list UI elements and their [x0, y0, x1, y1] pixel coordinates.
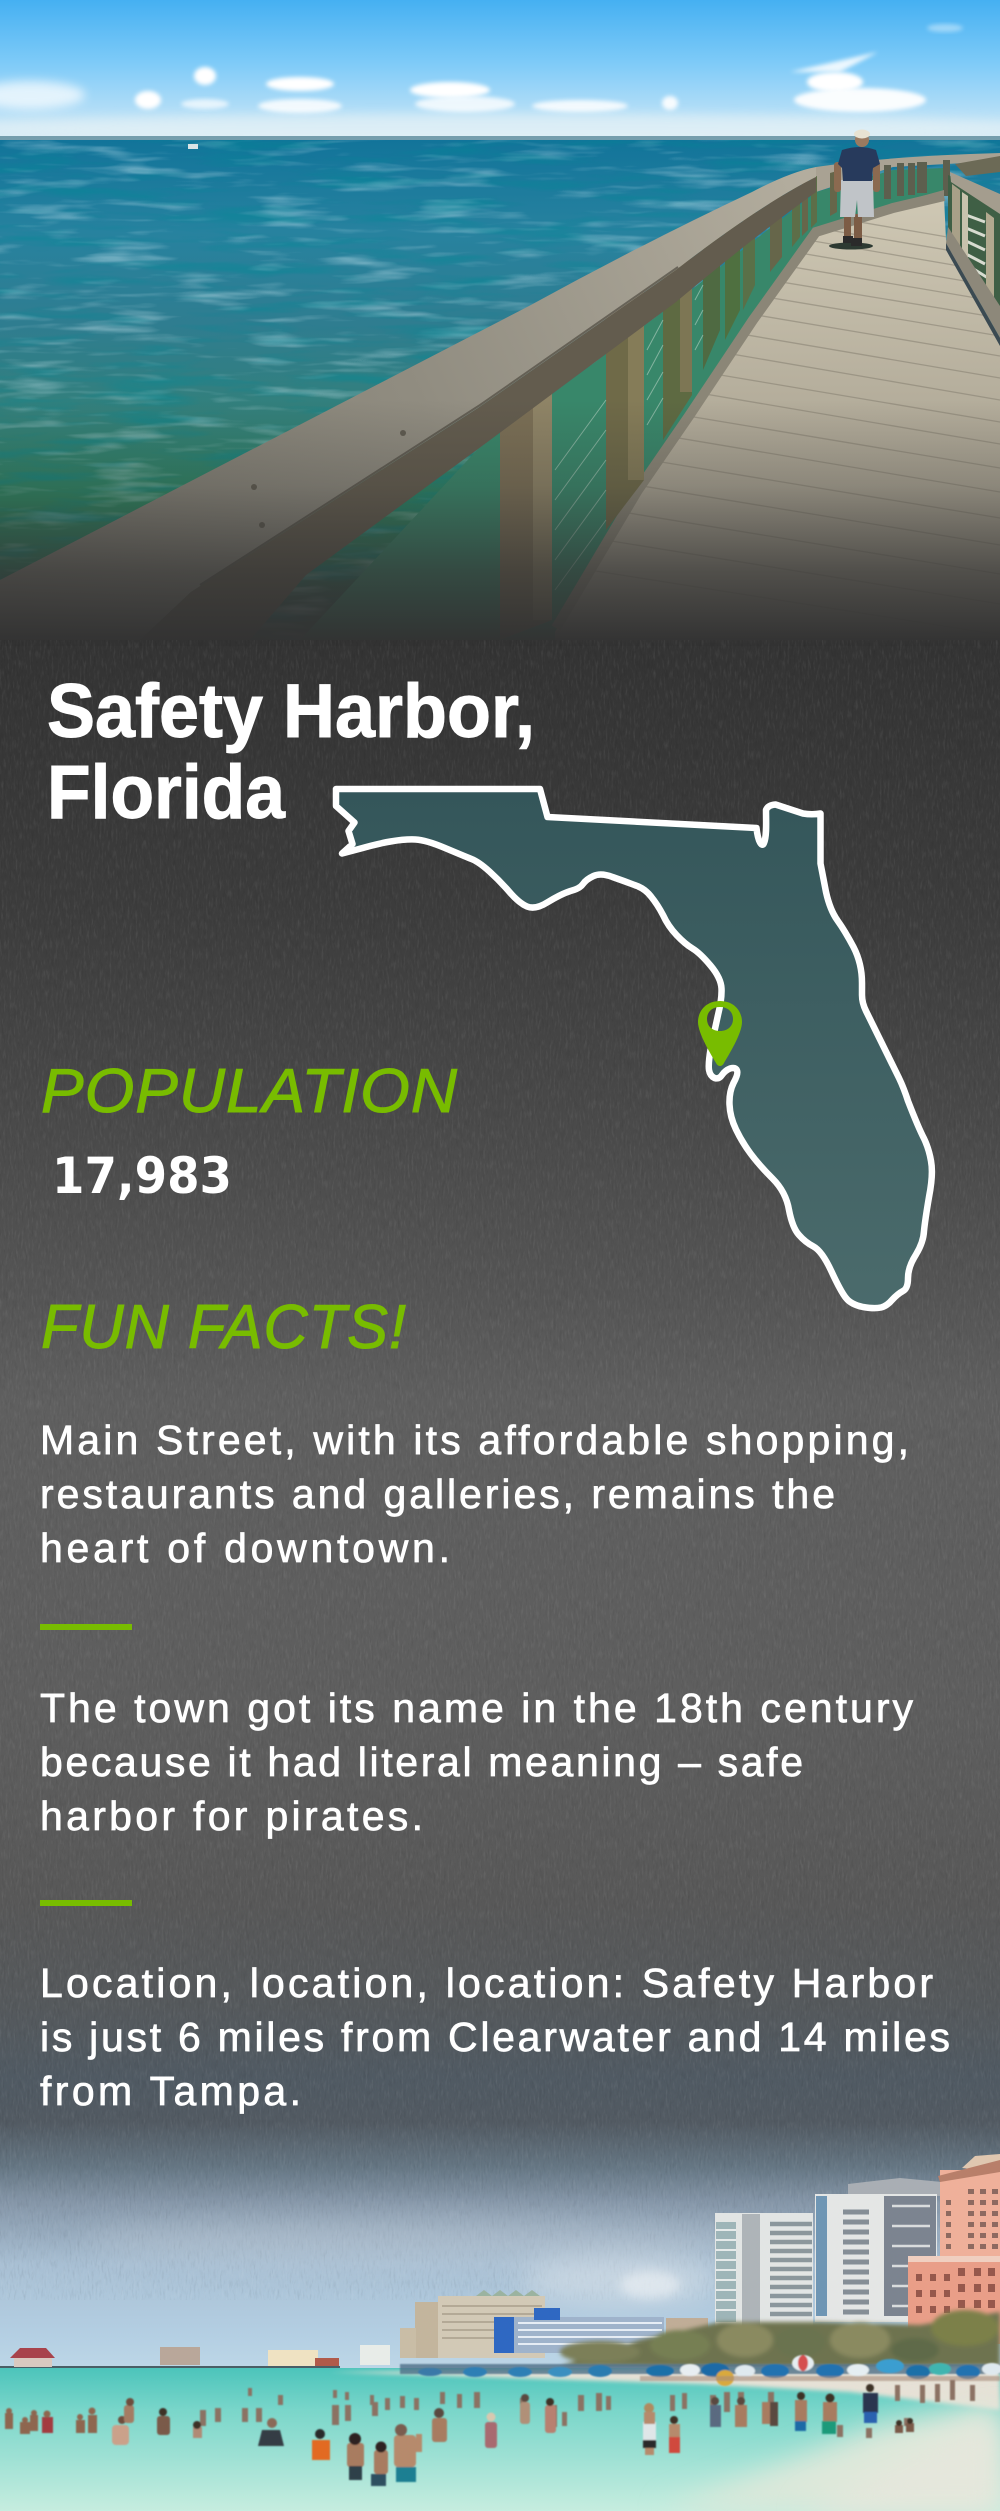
- lower curved rail: [556, 196, 944, 628]
- Florida outline: [336, 789, 932, 1308]
- near railing posts: [500, 171, 837, 640]
- sea and beach: [0, 2366, 1000, 2511]
- fun facts heading: FUN FACTS!: [41, 1293, 407, 1362]
- Florida state map with location pin: [336, 789, 932, 1308]
- divider: [40, 1624, 132, 1630]
- swimmer: [112, 2398, 134, 2445]
- fact two: The town got its name in the 18th century: [40, 1685, 913, 1731]
- man in dark shirt: [863, 2384, 878, 2423]
- population number: 17,983: [52, 1147, 232, 1205]
- fact one: heart of downtown.: [40, 1525, 450, 1571]
- swimmer in orange: [312, 2429, 330, 2460]
- swimmers: [520, 2394, 556, 2433]
- boy swimmer: [347, 2433, 364, 2480]
- fact two: [40, 1685, 913, 1839]
- swimmer: [432, 2408, 447, 2442]
- man in red shorts: [669, 2416, 680, 2453]
- title: [47, 669, 535, 835]
- title: Safety Harbor,: [47, 669, 535, 754]
- man walking on the boardwalk: [829, 130, 880, 250]
- swimmer: [193, 2421, 202, 2438]
- beach umbrellas: [400, 2355, 1000, 2386]
- salmon tall hotel: [938, 2154, 1000, 2270]
- swimmer in dark wetsuit: [258, 2418, 284, 2446]
- people in the shallows: [710, 2397, 778, 2427]
- children near shore: [895, 2418, 914, 2433]
- white high-rise: [715, 2213, 813, 2327]
- photo: Clearwater beach: [0, 2154, 1000, 2511]
- population heading: POPULATION: [41, 1057, 458, 1126]
- green water seen behind the railing: [300, 168, 944, 640]
- photo: boardwalk over the water: [0, 0, 1000, 646]
- fact two: because it had literal meaning – safe: [40, 1739, 803, 1785]
- fact three: Location, location, location: Safety Harbor: [40, 1960, 933, 2006]
- fact one: [40, 1417, 909, 1571]
- salmon lower hotel: [908, 2256, 1000, 2344]
- far railing section: [816, 153, 1000, 238]
- palm trees: [560, 2310, 1000, 2368]
- railing cables: [555, 285, 703, 590]
- boardwalk deck: [564, 201, 1000, 628]
- dark fade from photo into background: [0, 400, 1000, 646]
- distant skyline: [0, 2290, 708, 2378]
- paper grain texture: [0, 640, 1000, 2300]
- title: Florida: [47, 750, 286, 835]
- swimmers left group: [5, 2408, 97, 2434]
- fact one: Main Street, with its affordable shopping,: [40, 1417, 909, 1463]
- water: [0, 136, 1000, 640]
- adult swimmer: [394, 2424, 422, 2482]
- child swimmer: [371, 2442, 388, 2486]
- swimmer: [485, 2412, 497, 2448]
- distant crowd: [200, 2380, 975, 2438]
- fact one: restaurants and galleries, remains the: [40, 1471, 835, 1517]
- right railing: [946, 156, 1000, 346]
- hazy clouds: [80, 2216, 760, 2304]
- woman in white top: [643, 2403, 656, 2455]
- divider: [40, 1900, 132, 1906]
- swimmer: [157, 2408, 170, 2435]
- man in blue shorts: [795, 2392, 807, 2431]
- grey and white tower: [815, 2178, 942, 2322]
- pier pavilion: [10, 2348, 55, 2367]
- fact three: is just 6 miles from Clearwater and 14 miles: [40, 2014, 950, 2060]
- blue hotel: [494, 2308, 664, 2353]
- near railing top rail: [0, 167, 816, 640]
- location pin: [698, 1001, 742, 1066]
- fact three: from Tampa.: [40, 2068, 301, 2114]
- fact three: [40, 1960, 950, 2114]
- man in green shorts: [822, 2394, 837, 2434]
- bathers: [5, 2380, 975, 2486]
- sky with clouds: [0, 0, 1000, 142]
- fact two: harbor for pirates.: [40, 1793, 423, 1839]
